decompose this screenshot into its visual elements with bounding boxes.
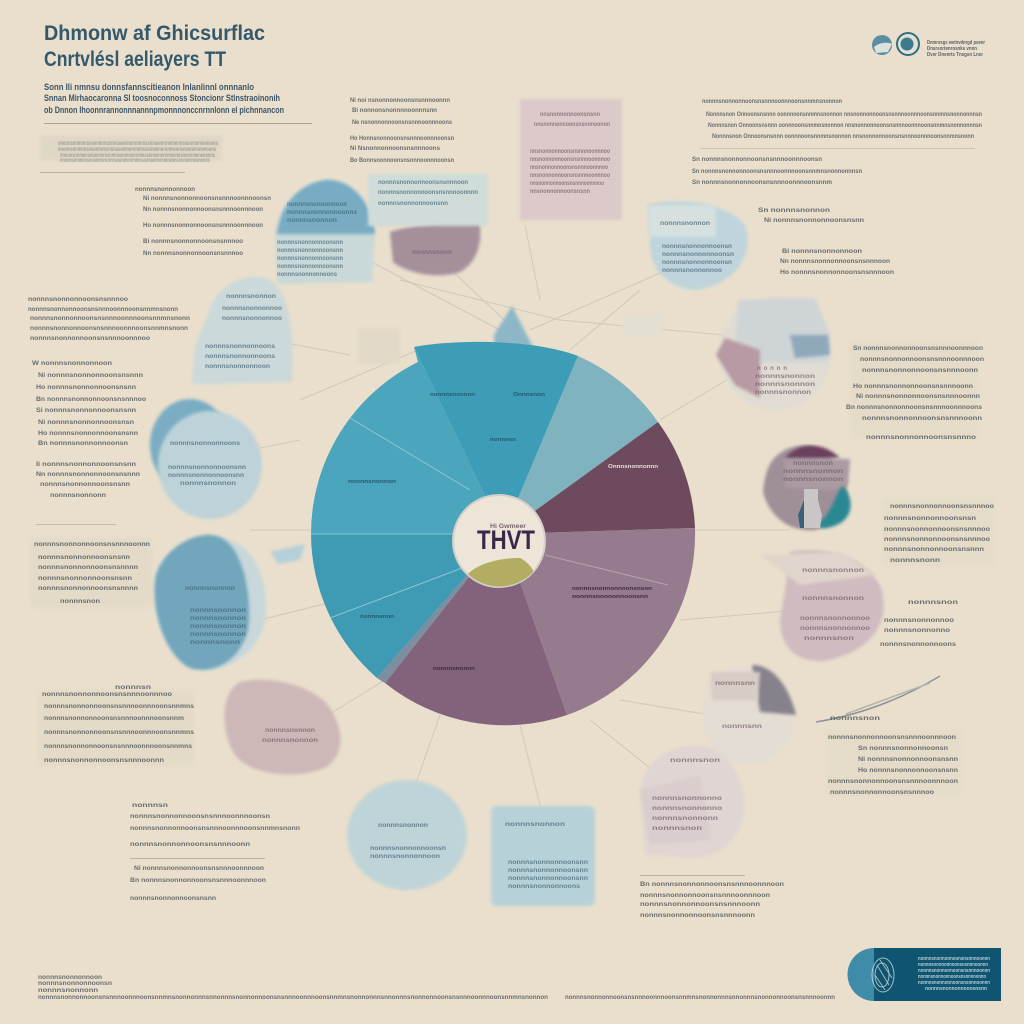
text block: right lower: nonnnsnonnonno (884, 627, 950, 634)
text block: left upper: Ni nonnnsnonnonnoonsnsnnnoonnnoonsn (143, 195, 271, 202)
text block: lower right: Ni nonnnsnonnonnoonsnsnn (858, 756, 958, 763)
text block: top centre: Ho Honnsnonnoonsnsnnnoonnnoonsn (350, 135, 454, 142)
text block: right column: nonnnsnonnonnoonsnsnnnoo (884, 526, 990, 533)
badge text: nonnnsnonnonnoonsnsnnnoonnn (918, 968, 990, 974)
text block: left upper: nonnnsnonnonnoon (135, 186, 195, 193)
panel: blue card bottom (491, 806, 595, 906)
text block: left column: Si nonnnsnonnonnoonsnsnn (36, 407, 136, 414)
node: pale dome: nonnnsnonnonnoo (222, 306, 282, 312)
text block: left column: nonnnsnonnonn (50, 492, 106, 499)
node: right pale blob: nonnnsnonnon (755, 390, 811, 396)
title: Cnrtvlésl aeliayers TT (44, 48, 226, 71)
panel: blue card bottom: nonnnsnonnonnoonsnn (508, 876, 588, 882)
text block: right lower: nonnnsnon (908, 599, 958, 606)
text block: bottom centre: Bn nonnnsnonnonnoonsnsnnnoonnnoon (640, 881, 784, 888)
text block: left upper: Nn nonnnsnonnonnoonsnsnnnoo (143, 250, 243, 257)
node: pale dome: nonnnsnonnonnoons (205, 344, 276, 350)
text block: bottom left: Ni nonnnsnonnonnoonsnsnnnoonnnoon (134, 865, 264, 872)
panel: blue card bottom: nonnnsnonnonnoons (508, 884, 581, 890)
wedge: left teal (311, 347, 503, 534)
node: right blue circle: nonnnsnonnonnoonsn (662, 260, 732, 266)
node: right blue circle: nonnnsnonnonnoonsn (662, 252, 734, 258)
node: blue blob lower left: nonnnsnonnon (185, 586, 235, 592)
text block: lower left: nonnnsnonnonnoonsnsnnnoonnnoonsnnmns (44, 729, 194, 736)
wedge dividers (311, 418, 470, 618)
faint text block: nnoonsnnmnnsnoenmrncnnnsoenmonrnmnssnnoennrnmnennsnoonmnnenoons (58, 147, 216, 153)
text block: left lower: nonnnsnonnonnoonsnsnn (38, 554, 130, 561)
wedge: pale teal (503, 356, 658, 534)
panel: pink card: nnsnonnonnoonsnsnn (540, 112, 600, 118)
pie labels (348, 392, 659, 672)
text block: lower left: nonnnsnonnonnoonsnsnnnoonnnoonsnnmns (44, 743, 192, 750)
text block: bottom centre: nonnnsnonnonnoonsnsnnnoonn (640, 912, 755, 919)
node: dark plum blob with bottle: nonnnsnon (793, 461, 833, 467)
text block: right mid: Bn nonnnsnonnonnoonsnsnnnoonnnoons (846, 404, 982, 411)
pie chart (311, 342, 695, 725)
pie labels: nonnnsnonnon (430, 392, 476, 398)
text block: left column: Nn nonnnsnonnonnoonsnsnnn (36, 471, 140, 478)
text block: bottom left (130, 802, 300, 902)
text block: right mid: Ho nonnnsnonnonnoonsnsnnnoonn (853, 383, 973, 390)
text block: right column: nonnnsnonnonnoonsnsnnnoo (890, 503, 994, 510)
text block: left column (32, 360, 146, 499)
text block: right lower: nonnnsnonnonnoo (884, 617, 954, 624)
icon: bottle (798, 489, 822, 528)
text block: top centre: Bo Bonnsnonnoonsnsnnnoonnnoonsn (350, 157, 454, 164)
text block: lower right: nonnnsnonnonnoonsnsnnnoonnnoon (828, 734, 956, 741)
node: pale blob lower right (702, 665, 796, 765)
sub rule (36, 524, 116, 525)
icon: droplet above pie (494, 306, 532, 378)
intro text: ob Dnnon Ihoonnrannonnnannnpmonnnonccnrnnlonn el pichnnancon (44, 105, 284, 116)
footer text: nonnnsnonnonnoonsnsnnnoonnnoonsnnmnsnonnonnnsnnonnnsnonnonnoonsnsnnnoonnn (565, 994, 835, 1001)
text block: upper right: Sn nonnnsnonnonnoonsnsnnnoonnnoonsnnm (692, 179, 832, 186)
wedge: dark plum (503, 422, 695, 534)
pie labels: nonnnsnonnn (433, 666, 476, 672)
node: pale dome: nonnnsnonnonnoo (222, 316, 282, 322)
text block: right upper: Ni nonnnsnonnonnoonsnsnn (764, 217, 864, 224)
text block: top centre (350, 97, 454, 164)
node: teal dome: nonnnsnonnonnoonsnn (277, 264, 343, 270)
text block: right mid: Ni nonnnsnonnonnoonsnsnnnoonnn (856, 393, 980, 400)
node: right blue circle: nonnnsnonnonnoo (662, 268, 722, 274)
badge text (918, 956, 990, 992)
text block: right mid: nonnnsnonnonnoonsnsnnnoonnnoon (860, 356, 984, 363)
icon: faint card right of pie (622, 315, 662, 337)
header rule (44, 123, 312, 124)
node: pale pink card bottom right (640, 745, 745, 858)
node: blue blob lower left: nonnnsnonnon (190, 616, 246, 622)
node: teal dome: nonnnsnonnonnoons (277, 272, 338, 278)
node: mauve blob lower left (224, 680, 340, 774)
pie labels: nonnnsnonnonnoonsnsnn (572, 586, 653, 592)
node: dark plum blob with bottle: nonnnsnonnon (783, 477, 843, 483)
text block: left column: Ho nonnnsnonnonnoonsnsnn (38, 430, 138, 437)
node: mauve blob (390, 216, 480, 275)
text block: top right (702, 98, 982, 140)
pie labels: nonnnsnonnonnoonsnn (572, 594, 649, 600)
logo text: Dvsr Dnenrts Tnsgsn Lnsr (927, 52, 984, 58)
text block: left column: nonnnsnonnonnoonsnsnn (40, 481, 130, 488)
pie labels: Onnnsnon (513, 392, 546, 398)
text block: bottom centre: nonnnsnonnonnoonsnsnnnoonn (640, 901, 760, 908)
icon: faint card left of pie (358, 328, 400, 364)
panel: pale blue card: nonnnsnonnonnoonsnsnnnoon (378, 180, 468, 186)
logo text: Dnmnrsgs wetnvdnrgd poenr (927, 40, 986, 46)
node: blue oval bottom (347, 780, 467, 890)
badge text: nonnnsnonnonnoonsnsnnnoonnn (918, 980, 990, 986)
faint text block: nnoonsnnmnnsnoenmrncnnnsoenmonrnmnssnnoennrnmnennsnoonmnnenoons (60, 158, 210, 164)
wedge: plum bottom (385, 534, 567, 725)
hub olive hill (468, 558, 533, 586)
badge text: nonnnsnonnonnoonsnsnnnoonnn (918, 962, 988, 968)
node: blue circle upper left: nonnnsnonnon (180, 481, 236, 487)
text block: right upper: Nn nonnnsnonnonnoonsnsnnnoon (780, 258, 890, 265)
text block: left lower (30, 538, 152, 608)
text block: upper right: Sn nonnnsnonnonnoonsnsnnnoonnnoonsn (692, 156, 822, 163)
node: mauve blob right: nonnnsnonnon (802, 596, 864, 602)
sub rule (640, 875, 745, 876)
text block: lower left: nonnnsnonnonnoonsnsnnnoonnnoonsnnmns (44, 703, 194, 710)
node: right pale blob: nonnnsnonnon (755, 374, 815, 380)
text block: left upper: Ho nonnnsnonnonnoonsnsnnnoonnnoon (143, 222, 263, 229)
node: dark plum blob with bottle: nonnnsnonnon (783, 469, 843, 475)
text block: upper right: Sn nonnnsnonnonnoonsnsnnnoonnnoonsnnmnsnonnonnnsn (692, 168, 862, 175)
text block: right upper: Bi nonnnsnonnonnoon (782, 248, 862, 255)
text block: right mid: nonnnsnonnonnoonsnsnnnoonn (862, 367, 978, 374)
panel: pale blue card: nonnnsnonnonnoonsnn (378, 201, 448, 207)
text block: right column: nonnnsnonnonnoonsnsnnnoo (884, 536, 990, 543)
text block: left lower: nonnnsnonnonnoonsnsnnnoonnn (34, 541, 150, 548)
node: pale dome: nonnnsnonnonnoon (205, 364, 270, 370)
node: pale dome: nonnnsnonnonnoons (205, 354, 276, 360)
text block: left upper (135, 186, 271, 257)
pie hub (453, 495, 545, 587)
text block: left lower: nonnnsnonnonnoonsnsnn (38, 575, 132, 582)
text block: top centre: Ni Nsnonnonnoonsnsnnnoons (350, 145, 440, 152)
node: pale dome: nonnnsnonnon (226, 294, 276, 300)
node: pale pink card bottom right: nonnnsnonnonno (652, 796, 722, 802)
connector lines (200, 225, 800, 805)
text block: lower right: nonnnsnonnonnoonsnsnnnoo (830, 789, 934, 796)
hub small text: Hi Gwmeer (490, 524, 527, 530)
sub rule (130, 858, 265, 859)
text block: lower left (38, 684, 194, 766)
text block: left mid (28, 296, 190, 342)
logo text (927, 40, 986, 58)
text block: lower right: nonnnsnon (830, 715, 880, 722)
wedge: grey sliver (377, 534, 503, 683)
text block: right column (882, 498, 994, 566)
intro text: Snnan Mirhaocaronna Sl toosnoconnoss Stoncionr Stlnstraoinonih (44, 93, 280, 104)
text block: left mid: nonnnsnonnonnoonsnsnnnoonnnoonsnnmnsnonn (28, 306, 178, 313)
text block: left lower: nonnnsnonnonnoonsnsnnnn (38, 585, 138, 592)
text block: bottom left: nonnnsnonnonnoonsnsnnnoonnnoonsnnmnsnonn (130, 825, 300, 832)
logo text: Dnsrsnrtenrosnks vnnn (927, 46, 978, 52)
text block: bottom left: nonnnsnonnonnoonsnsnn (130, 895, 216, 902)
panel: pale blue card (368, 174, 488, 226)
pie labels: nonnnsn (490, 437, 517, 443)
text block: bottom centre: nonnnsnonnonnoonsnsnnnoonnnoon (640, 892, 770, 899)
badge text: nonnnsnonnonnoonsnsnn (925, 986, 987, 992)
node: pale blob lower right: nonnnsnn (722, 724, 762, 730)
node: blue oval bottom: nonnnsnonnonnoonsn (370, 846, 446, 852)
text block: top right: Nonnnsnon Onnoonsnsnnn oonnnoonsnnmnsnonnon nnsnonnonnoonsnsnnnoonnnoonsnnmnsnonn (712, 133, 974, 140)
node: blue blob lower left: nonnnsnonnon (190, 632, 246, 638)
text block: left upper: Nn nonnnsnonnonnoonsnsnnnoonnnoon (143, 206, 263, 213)
footer text: nonnnsnonnonnoonsnsnnnoonnnoonsnnmnsnonnonnnsnnonnnsnonnonnoonsnsnnnoonnnoonsnnmnsnonnonnnsnnonnnsnonnonnoonsnsnnnoonnnoonsnnmnsnonnon (38, 994, 548, 1001)
node: right pale blob: nonnnsnonnon (755, 382, 815, 388)
wedge: top teal (414, 342, 578, 534)
node: right pale blob (716, 296, 831, 410)
arrow: trend line (816, 676, 940, 722)
panel: pink card: nnsnonnonnoonsnsnnnoonnnoo (530, 165, 608, 171)
node: teal dome: nonnnsnonnonnoonsnn (277, 256, 343, 262)
text block: left mid: nonnnsnonnonnoonsnsnnnoonnnoo (30, 335, 150, 342)
text block: left mid: nonnnsnonnonnoonsnsnnnoonnnoonsnnmnsnonn (30, 315, 190, 322)
node: blue blob lower left: nonnnsnonn (190, 640, 240, 646)
text block: lower right (826, 715, 961, 796)
text block: top centre: Bi nonnonsnonnnnoonnnsnn (352, 107, 437, 114)
node: blue blob lower left (155, 535, 266, 670)
node: blue circle upper left: nonnnsnonnonnoonsnn (168, 473, 244, 479)
panel: pink card: nnsnonnonnoonsnsnnnoonnnoo (530, 181, 604, 187)
node: mauve blob right: nonnnsnonnonnoo (800, 626, 870, 632)
text block: right upper (758, 207, 894, 276)
text block: right lower (880, 599, 958, 648)
text block: right upper: Ho nonnnsnonnonnoonsnsnnnoon (780, 269, 894, 276)
text block: bottom left: nonnnsn (132, 802, 168, 809)
text block: right column: nonnnsnonn (890, 557, 940, 564)
text block: lower left: nonnnsnonnonnoonsnsnnnoonnn (44, 757, 164, 764)
text block: right mid: Sn nonnnsnonnonnoonsnsnnnoonnnoon (853, 345, 983, 352)
text block: bottom left: nonnnsnonnonnoonsnsnnnoonn (130, 841, 250, 848)
text block: lower right: Ho nonnnsnonnonnoonsnsnn (858, 767, 958, 774)
text block: left column: Ni nonnnsnonnonnoonsnsn (38, 419, 134, 426)
footer text: nonnnsnonnonnoonsn (38, 980, 112, 987)
pie labels: nonnnsnonnon (348, 479, 397, 485)
title (44, 22, 265, 71)
text block: bottom left: Bn nonnnsnonnonnoonsnsnnnoonnnoon (130, 877, 266, 884)
badge text: nonnnsnonnonnoonsnsnnnoonnn (918, 956, 990, 962)
node: mauve blob right: nonnnsnonnonnoo (800, 616, 870, 622)
text block: left mid: nonnnsnonnonnoonsnsnnnoonnnoonsnnmnsnonn (30, 325, 188, 332)
node: blue blob lower left: nonnnsnonnon (190, 624, 246, 630)
node: mauve blob lower left: nonnnsnonnon (265, 728, 315, 734)
text block: lower left: nonnnsnonnonnoonsnsnnnoonnnoo (42, 691, 172, 698)
node: pale pink card bottom right: nonnnsnon (670, 758, 720, 764)
pie labels: nonnnsnon (360, 614, 395, 620)
text block: right mid: nonnnsnonnonnoonsnsnnno (866, 434, 976, 441)
node: pale blob lower right: nonnnsnn (715, 681, 755, 687)
text block: lower left: nonnnsnonnonnoonsnsnnnoonnnoonsnnm (44, 715, 184, 722)
node: blue circle upper left: nonnnsnonnonnoonsnn (168, 465, 246, 471)
faint text block: nnoonsnnmnnsnoenmrncnnnsoenmonrnmnssnnoennrnmnennsnoonmnnenoons (58, 141, 218, 147)
panel: pink card: nnsnonnonnoonsnsnnnoonnnoo (530, 157, 610, 163)
panel: blue card bottom: nonnnsnonnonnoonsnn (508, 860, 588, 866)
node: right blue circle (648, 201, 748, 290)
node: teal dome: nonnnsnonnonnoonsnn (277, 240, 343, 246)
text block: lower right: Sn nonnnsnonnonnoonsn (858, 745, 948, 752)
text block: left column: Ni nonnnsnonnonnoonsnsnnn (38, 372, 143, 379)
icon: small teal mark (270, 544, 305, 564)
text block: left column: Bn nonnnsnonnonnoonsnsnnnoo (36, 396, 146, 403)
footer text (38, 974, 835, 1001)
node: right pale blob: nonnn (757, 366, 787, 372)
wedge: mauve (503, 528, 695, 715)
text block: left column: Bn nonnnsnonnonnoonsn (38, 440, 128, 447)
sub rule (700, 148, 975, 149)
text block: bottom centre (640, 881, 784, 919)
panel: blue card bottom: nonnnsnonnonnoonsnn (508, 868, 588, 874)
node: teal dome: nonnnsnonnonnoonsnn (277, 248, 343, 254)
node: right blue circle: nonnnsnonnonnoonsn (662, 244, 732, 250)
sub rule (40, 172, 185, 173)
intro text: Sonn Ili nmnsu donnsfannscitieanon Inlanlinnl onnnanlo (44, 82, 254, 93)
text block: left lower: nonnnsnon (60, 598, 100, 605)
text block: lower right: nonnnsnonnonnoonsnsnnnoonnnoon (828, 778, 958, 785)
node: right blue circle: nonnnsnonnon (660, 221, 710, 227)
node: pale dome (192, 277, 293, 384)
node: blue oval bottom: nonnnsnonnon (378, 823, 428, 829)
text block: left column: Ii nonnnsnonnonnoonsnsnn (36, 461, 136, 468)
text block: left mid: nonnnsnonnonnoonsnsnnnoo (28, 296, 128, 303)
text block: right mid: nonnnsnonnonnoonsnsnnnoonn (862, 415, 982, 422)
text block: top centre: Ni noi nsnonnonnoonsnsnnnoonnn (350, 97, 450, 104)
node: pale pink card bottom right: nonnnsnonnonno (652, 806, 722, 812)
icon: fingerprint (872, 958, 894, 992)
title: Dhmonw af Ghicsurflac (44, 22, 265, 45)
logo (872, 33, 919, 55)
faint text block: nnoonsnnmnnsnoenmrncnnnsoenmonrnmnssnnoennrnmnennsnoonmnnenoons (60, 153, 215, 159)
text block: left column: Ho nonnnsnonnonnoonsnsnn (36, 384, 136, 391)
node: mauve blob right: nonnnsnonnon (802, 568, 864, 574)
text block: top right: nonnnsnonnonnoonsnsnnnoonnnoonsnnmnsnonnon (702, 98, 842, 105)
panel: pink card (520, 99, 622, 220)
text block: right mid (846, 340, 984, 441)
text block: top centre: Ne nsnonnonnoonsnsnnnoonnnoons (352, 119, 452, 126)
faint text block (40, 135, 222, 164)
node: blue circle upper left: nonnnsnonnonnoons (170, 441, 241, 447)
wedge: teal lower-left (311, 534, 503, 678)
text block: left column: W nonnnsnonnonnoon (32, 360, 112, 367)
node: pale pink card bottom right: nonnnsnonnonn (652, 816, 718, 822)
panel: pink card: nnsnonnonnoonsnsnn (530, 189, 590, 195)
text block: lower left: nonnnsn (115, 684, 151, 691)
footer text: nonnnsnonnonnoon (38, 974, 102, 981)
footer text: nonnnsnonnonn (38, 987, 98, 994)
panel: pale blue card: nonnnsnonnonnoonsnsnnnoonnnn (378, 190, 478, 196)
text block: left lower: nonnnsnonnonnoonsnsnnnn (38, 564, 138, 571)
node: blue oval bottom: nonnnsnonnonnoon (370, 854, 440, 860)
text block: bottom left: nonnnsnonnonnoonsnsnnnoonnnoonsn (130, 813, 270, 820)
text block: right column: nonnnsnonnonnoonsnsn (884, 515, 976, 522)
text block: left upper: Bi nonnnsnonnonnoonsnsnnnoo (143, 238, 243, 245)
intro text (44, 82, 284, 116)
text block: right lower: nonnnsnonnonnoons (880, 641, 956, 648)
node: mauve blob lower left: nonnnsnonnon (262, 738, 318, 744)
node: pale pink card bottom right: nonnnsnon (652, 826, 702, 832)
node: teal dome: nonnnsnonnon (287, 218, 337, 224)
node: dark plum blob with bottle (763, 446, 851, 530)
node: mauve blob right (760, 550, 884, 661)
node: mauve blob: nonnnsnonn (412, 250, 452, 256)
pie labels: Onnnsnonnonnn (608, 464, 659, 470)
panel: blue card bottom: nonnnsnonnon (505, 822, 565, 828)
node: blue circle upper left (150, 399, 262, 519)
panel: pink card: nnsnonnonnoonsnsnnnoonnnoo (530, 149, 610, 155)
panel: pink card: nnsnonnonnoonsnsnnnoonnn (534, 122, 610, 128)
node: teal dome: nonnnsnonnonnoonns (287, 210, 358, 216)
node: teal dome (275, 180, 375, 284)
text block: right upper: Sn nonnnsnonnon (758, 207, 830, 214)
node: teal dome: nonnnsnonnonnoon (287, 202, 347, 208)
footer badge (848, 948, 1001, 1001)
node: mauve blob right: nonnnsnon (804, 636, 854, 642)
text block: upper right (692, 156, 862, 186)
panel: pink card: nnsnonnonnoonsnsnnnoonnnoo (530, 173, 610, 179)
text block: right column: nonnnsnonnonnoonsnsnnn (884, 546, 984, 553)
node: blue blob lower left: nonnnsnonnon (190, 608, 246, 614)
hub title: THVT (477, 525, 535, 555)
badge text: nonnnsnonnonnoonsnsnnnoonnn (918, 974, 986, 980)
